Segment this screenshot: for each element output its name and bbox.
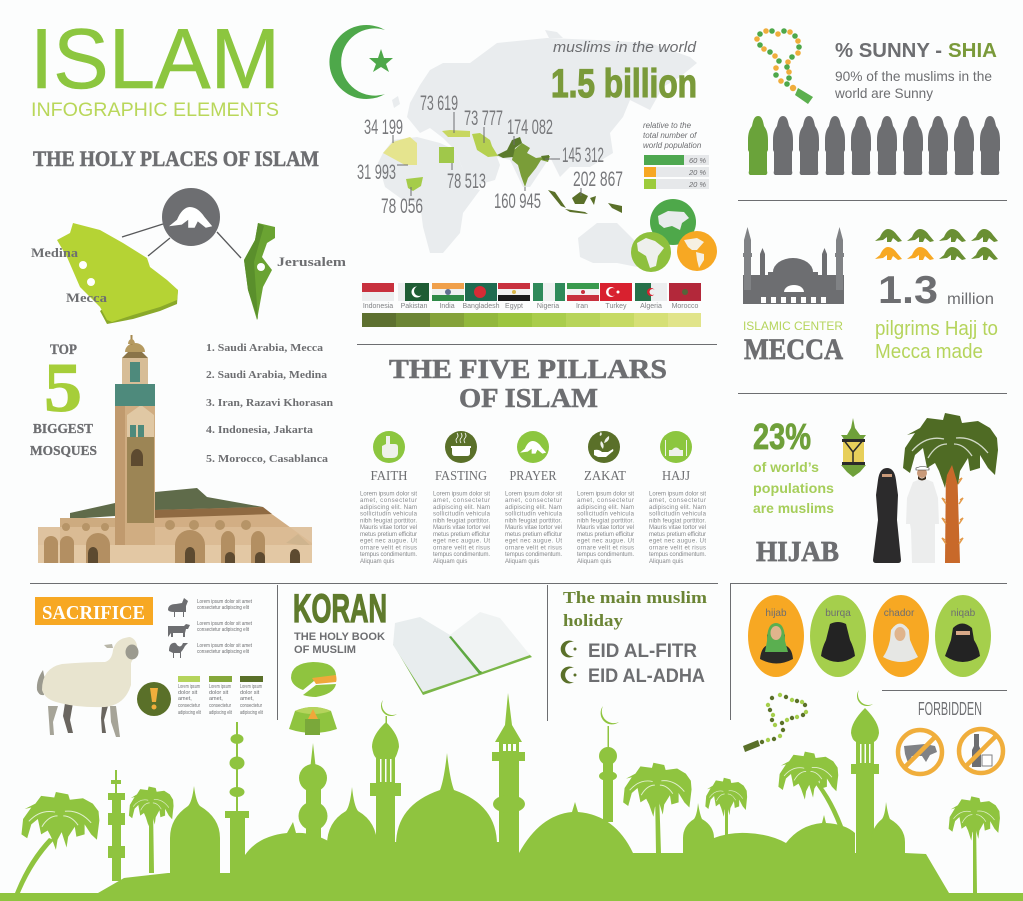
text: zakat: sollicitudin vehicula [577, 512, 635, 518]
icon: no pork [898, 730, 942, 774]
legend: sacrifice bars: adipiscing elit [209, 710, 232, 716]
pillar names: FAITH [370, 469, 408, 484]
figures: 202 867 [573, 168, 623, 191]
oval: chador [873, 595, 929, 677]
heading: forbidden: FORBIDDEN [918, 699, 982, 719]
oval: niqab [935, 595, 991, 677]
text: Islamic center: ISLAMIC CENTER [743, 321, 843, 333]
text: fasting: amet, consectetur [433, 498, 490, 504]
heading: main holiday: The main muslim [563, 588, 707, 607]
panel: top 5 mosques [30, 335, 333, 563]
flag: Algeria [635, 283, 667, 301]
flags row [362, 283, 701, 310]
heading: of Islam: OF ISLAM [459, 383, 598, 413]
panel: holy places map [31, 188, 346, 324]
leader lines [393, 112, 581, 196]
flag: Nigeria [533, 283, 565, 301]
text: hajj: Lorem ipsum dolor sit [649, 492, 706, 498]
text: sunny description [834, 68, 992, 101]
legend: sacrifice bars: Lorem ipsum [209, 684, 231, 690]
icon: no alcohol [959, 729, 1003, 773]
text: pilgrims: Mecca made [875, 341, 983, 363]
panel: sunny shia [748, 28, 1000, 175]
text: hajj: nibh feugiat porttitor. [649, 518, 706, 524]
legend: relative population: 20 % [688, 168, 706, 177]
legend: relative population [643, 121, 709, 189]
text: faith: nibh feugiat porttitor. [360, 518, 417, 524]
heading: main holiday [563, 588, 707, 630]
text: zakat: Mauris vitae tortor vel [577, 525, 634, 531]
legend: sacrifice bars: amet, [178, 696, 192, 702]
text: prayer: sollicitudin vehicula [505, 512, 563, 518]
palm three [623, 763, 692, 853]
oval: burqa [810, 595, 866, 677]
legend: relative population: relative to the [643, 121, 692, 130]
text: prayer: ornare velit et risus [505, 545, 562, 551]
heading: five pillars: THE FIVE PILLARS [389, 354, 667, 384]
figures: 160 945 [494, 190, 541, 213]
panel: hijab types [748, 595, 991, 677]
text: biggest: BIGGEST [33, 422, 94, 437]
text: prayer: nibh feugiat porttitor. [505, 518, 562, 524]
text: sacrifice captions: consectetur adipiscing elit [197, 649, 250, 655]
figure: woman in abaya [873, 468, 901, 563]
text: sacrifice captions: Lorem ipsum dolor sit amet [197, 621, 253, 627]
text: prayer: Lorem ipsum dolor sit [505, 492, 562, 498]
icon: prayer [517, 431, 549, 463]
text: pilgrims: pilgrims Hajj to [875, 318, 998, 340]
label: Jerusalem: Jerusalem [277, 254, 346, 269]
text: prayer: Aliquam quis [505, 559, 539, 565]
text: zakat: nibh feugiat porttitor. [577, 518, 634, 524]
heading: main holiday: holiday [563, 611, 624, 630]
flag: Iran [567, 283, 599, 301]
legend: sacrifice bars: adipiscing elit [240, 710, 263, 716]
heading: hijab: HIJAB [756, 536, 839, 568]
minaret four [370, 700, 401, 845]
text: million: million [947, 291, 994, 308]
palm six [949, 796, 1000, 893]
illustration: date palm [903, 413, 998, 563]
thin tower [108, 770, 125, 881]
figure: man in thobe [906, 466, 939, 563]
gradient bar [362, 313, 701, 327]
figures: 174 082 [507, 116, 553, 139]
minaret seven [851, 690, 879, 855]
statistic: 1.5 billion: 1.5 billion [551, 62, 697, 106]
legend: sacrifice bars: dolor sit [178, 690, 198, 696]
list of mosques [206, 342, 333, 465]
icon: fasting [445, 431, 477, 463]
illustration: sheep [37, 637, 138, 737]
text: sunny description: world are Sunny [834, 85, 933, 101]
text: sacrifice captions [197, 599, 253, 655]
text: faith: tempus condimentum. [360, 552, 417, 558]
text: fasting: Aliquam quis [433, 559, 467, 565]
icon: zakat [588, 431, 620, 463]
text: faith: Mauris vitae tortor vel [360, 525, 417, 531]
list of mosques: 5. Morocco, Casablanca [206, 453, 329, 465]
dome two [327, 787, 377, 845]
panel: 23 percent [753, 413, 998, 568]
icon: faith [373, 431, 405, 463]
oval: burqa: burqa [825, 608, 851, 619]
text: hajj: sollicitudin vehicula [649, 512, 707, 518]
minaret two [225, 722, 249, 876]
text: hajj: amet, consectetur [649, 498, 706, 504]
text: holy book: OF MUSLIM [294, 644, 356, 656]
text: faith: amet, consectetur [360, 498, 417, 504]
text: fasting: metus pretium efficitur [433, 532, 490, 538]
flag: Turkey [600, 283, 632, 301]
minaret five [492, 693, 525, 853]
minaret three [298, 743, 328, 840]
legend: sacrifice bars: consectetur [178, 703, 200, 709]
icon: beads dark [743, 693, 808, 752]
legend: sacrifice bars: amet, [240, 696, 254, 702]
subtitle: INFOGRAPHIC ELEMENTS [31, 100, 279, 121]
text: sacrifice captions: consectetur adipiscing elit [197, 605, 250, 611]
text: faith: eget nec augue. Ut [360, 539, 417, 545]
number 5: 5 [44, 350, 82, 427]
flag labels [363, 303, 699, 310]
pictogram: women row [748, 116, 1000, 175]
text: hajj: eget nec augue. Ut [649, 539, 706, 545]
text: sunny description: 90% of the muslims in the [835, 68, 992, 84]
text: prayer: metus pretium efficitur [505, 532, 562, 538]
list of mosques: 3. Iran, Razavi Khorasan [206, 397, 333, 409]
legend: relative population: total number of [643, 131, 697, 140]
text: fasting: Mauris vitae tortor vel [433, 525, 490, 531]
figures: 73 619 [420, 92, 458, 115]
icon: fez [289, 707, 337, 735]
text: faith: Aliquam quis [360, 559, 394, 565]
text: population share: of world’s [753, 459, 819, 475]
text: faith: metus pretium efficitur [360, 532, 417, 538]
text: pilgrims [875, 318, 998, 363]
heading accent: shia: SHIA [948, 40, 997, 62]
mounds right [714, 815, 855, 855]
text: fasting: nibh feugiat porttitor. [433, 518, 490, 524]
pillar names: FASTING [435, 469, 487, 484]
text: population share [753, 459, 834, 516]
flag labels: Turkey [605, 303, 627, 310]
legend: sacrifice bars: amet, [209, 696, 223, 702]
panel: sacrifice [35, 597, 263, 737]
text: sacrifice captions: consectetur adipiscing elit [197, 627, 250, 633]
panel: world map [357, 30, 717, 272]
dome group left [170, 786, 220, 873]
title: ISLAM [30, 12, 280, 107]
figures: 78 056 [381, 195, 423, 218]
pillar names: HAJJ [662, 469, 690, 484]
text: zakat: Lorem ipsum dolor sit [577, 492, 634, 498]
palm two [129, 786, 174, 873]
map: Saudi Arabia [57, 223, 178, 324]
map: grey continents [378, 30, 697, 267]
flag labels: Egypt [505, 303, 523, 310]
legend: relative population: 20 % [688, 180, 706, 189]
icon: pie [291, 662, 336, 697]
statistic: 1.3: 1.3 [878, 269, 938, 312]
flag labels: Pakistan [401, 303, 428, 310]
panel: holidays [561, 588, 707, 687]
label: Mecca: Mecca [66, 290, 108, 305]
text: fasting: eget nec augue. Ut [433, 539, 490, 545]
text: hajj: Aliquam quis [649, 559, 683, 565]
map: highlighted countries [383, 130, 622, 214]
heading: Mecca: MECCA [744, 333, 843, 366]
icon: lantern [841, 418, 866, 477]
text: fasting: Lorem ipsum dolor sit [433, 492, 490, 498]
legend: sacrifice bars [178, 676, 263, 716]
text: zakat: metus pretium efficitur [577, 532, 634, 538]
text: prayer: Mauris vitae tortor vel [505, 525, 562, 531]
text: prayer: amet, consectetur [505, 498, 562, 504]
legend: sacrifice bars: consectetur [209, 703, 231, 709]
flag: Pakistan [398, 283, 429, 301]
legend: sacrifice bars: dolor sit [209, 690, 229, 696]
pictogram: pilgrims [875, 229, 998, 260]
icon: small cow [168, 624, 190, 637]
skyline silhouette [0, 690, 1023, 901]
text: zakat: eget nec augue. Ut [577, 539, 634, 545]
list of mosques: 1. Saudi Arabia, Mecca [206, 342, 324, 354]
figures: 78 513 [447, 170, 486, 193]
palm one [15, 792, 99, 893]
flag labels: Nigeria [537, 303, 559, 310]
text: Eid al-Adha: EID AL-ADHA [588, 666, 705, 687]
text: Eid al-Fitr: EID AL-FITR [588, 641, 697, 662]
figures: 73 777 [464, 107, 503, 130]
list of mosques: 4. Indonesia, Jakarta [206, 424, 314, 436]
flag labels: Algeria [640, 303, 662, 310]
heading: holy places: THE HOLY PLACES OF ISLAM [33, 146, 319, 171]
dome six [871, 802, 905, 855]
connector lines [122, 224, 241, 258]
legend: relative population: world population [643, 141, 702, 150]
text: population share: are muslims [753, 500, 834, 516]
panel: forbidden [743, 693, 1003, 774]
palm four [705, 778, 747, 835]
map: Israel [244, 223, 275, 320]
legend: relative population: 60 % [689, 156, 706, 165]
text: top: TOP [50, 342, 77, 358]
flag labels: India [439, 303, 455, 310]
flag: Morocco [669, 283, 701, 301]
figures: 31 993 [357, 161, 396, 184]
text: mosques: MOSQUES [30, 444, 97, 459]
text: hajj: tempus condimentum. [649, 552, 706, 558]
text: faith: ornare velit et risus [360, 545, 417, 551]
text: hajj: metus pretium efficitur [649, 532, 706, 538]
text: hajj: ornare velit et risus [649, 545, 706, 551]
flag labels: Iran [576, 303, 588, 310]
icon: small sheep [168, 598, 188, 617]
label: Medina: Medina [31, 245, 79, 260]
text: population share: populations [753, 480, 834, 496]
illustration: Hassan II mosque [38, 335, 312, 563]
text: holy book: THE HOLY BOOK [294, 631, 385, 643]
icon: continent circles [631, 199, 717, 272]
oval: hijab [748, 595, 804, 677]
flag labels: Morocco [672, 303, 699, 310]
panel: Mecca [743, 227, 998, 366]
icon: warning [137, 682, 171, 716]
text: sacrifice captions: Lorem ipsum dolor sit amet [197, 599, 253, 605]
text: fasting: sollicitudin vehicula [433, 512, 491, 518]
legend: sacrifice bars: dolor sit [240, 690, 260, 696]
icon: crescent two [561, 667, 576, 684]
text: prayer: tempus condimentum. [505, 552, 562, 558]
icon: hajj [660, 431, 692, 463]
text: zakat: amet, consectetur [577, 498, 634, 504]
oval: chador: chador [884, 608, 915, 619]
minaret six [599, 706, 619, 822]
text: fasting: adipiscing elit. Nam [433, 505, 490, 511]
figures: 34 199 [364, 116, 403, 139]
list of mosques: 2. Saudi Arabia, Medina [206, 369, 328, 381]
text: fasting: ornare velit et risus [433, 545, 490, 551]
text: muslims in the world: muslims in the world [553, 39, 697, 56]
flag: Egypt [498, 283, 530, 301]
pillar names [370, 469, 690, 484]
banner: sacrifice: SACRIFICE [42, 602, 145, 624]
text: faith: Lorem ipsum dolor sit [360, 492, 417, 498]
text: zakat: ornare velit et risus [577, 545, 634, 551]
palm five [778, 752, 843, 826]
flag: Indonesia [362, 283, 394, 301]
figures [357, 92, 623, 218]
panel: five pillars [360, 354, 707, 565]
text: holy book [294, 631, 385, 656]
text: zakat: tempus condimentum. [577, 552, 634, 558]
legend: sacrifice bars: adipiscing elit [178, 710, 201, 716]
pillar names: PRAYER [510, 469, 557, 484]
oval: hijab: hijab [765, 608, 787, 619]
text: prayer: eget nec augue. Ut [505, 539, 562, 545]
flag: Bangladesh [465, 283, 497, 301]
text: faith: adipiscing elit. Nam [360, 505, 417, 511]
oval: niqab: niqab [951, 608, 976, 619]
icon: small camel [169, 643, 188, 658]
text: faith: sollicitudin vehicula [360, 512, 418, 518]
heading: sunny shia: % SUNNY - [835, 40, 942, 62]
text: fasting: tempus condimentum. [433, 552, 490, 558]
text: hajj: Mauris vitae tortor vel [649, 525, 706, 531]
flag: India [432, 283, 464, 301]
icon: crescent and star [329, 25, 393, 99]
text: prayer: adipiscing elit. Nam [505, 505, 562, 511]
text: zakat: Aliquam quis [577, 559, 611, 565]
statistic: 23%: 23% [753, 416, 811, 457]
icon: mosque silhouette [743, 227, 844, 304]
dome three [396, 753, 497, 845]
panel: Koran [289, 587, 532, 735]
flag labels: Bangladesh [463, 303, 500, 310]
pillar names: ZAKAT [584, 469, 626, 484]
icon: prayer circle [162, 188, 220, 246]
icon: prayer beads [754, 28, 813, 104]
heading: Koran: KORAN [293, 587, 387, 631]
figures: 145 312 [562, 144, 604, 167]
flag labels: Indonesia [363, 303, 393, 310]
legend: sacrifice bars: Lorem ipsum [240, 684, 262, 690]
text: hajj: adipiscing elit. Nam [649, 505, 706, 511]
legend: sacrifice bars: consectetur [240, 703, 262, 709]
icon: crescent one [561, 640, 576, 657]
legend: sacrifice bars: Lorem ipsum [178, 684, 200, 690]
text: zakat: adipiscing elit. Nam [577, 505, 634, 511]
dome five [683, 803, 714, 855]
illustration: open book [393, 612, 532, 695]
text: sacrifice captions: Lorem ipsum dolor sit amet [197, 643, 253, 649]
